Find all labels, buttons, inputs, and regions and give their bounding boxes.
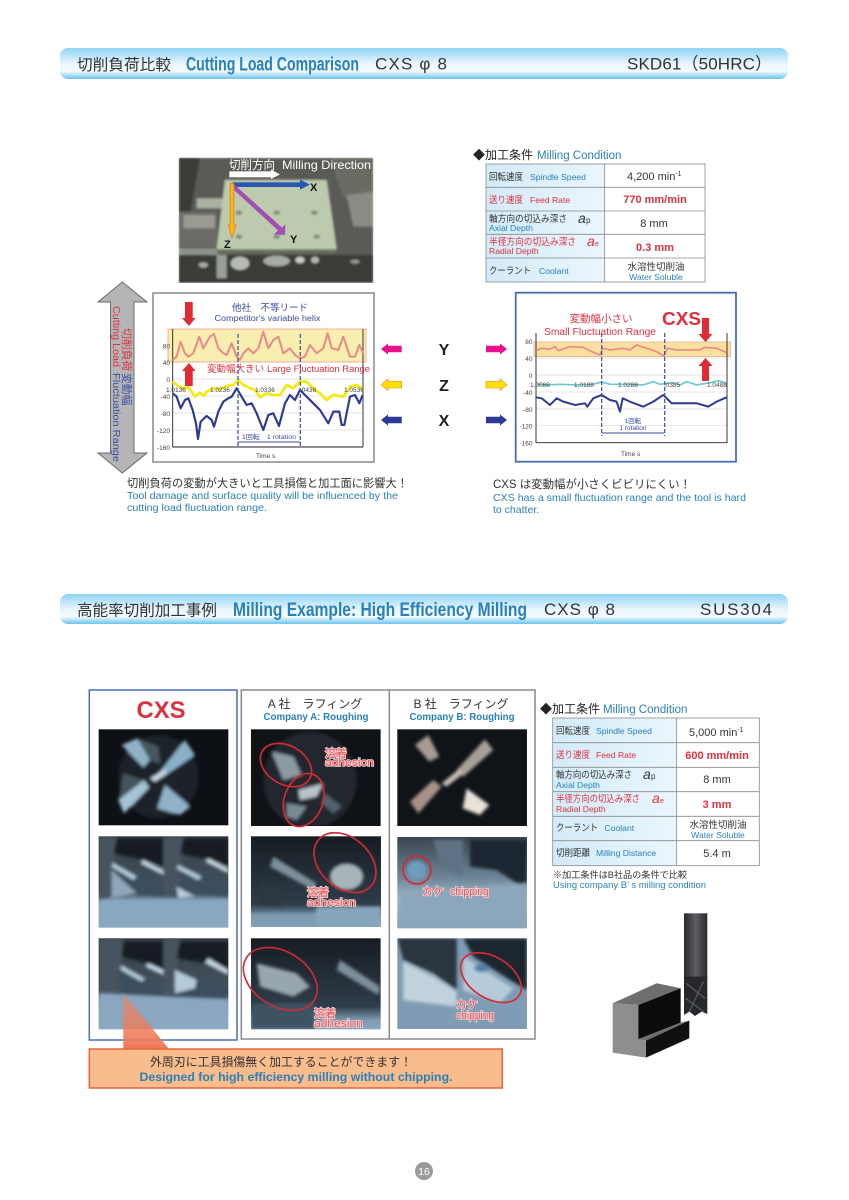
milling condition table: first test: 水溶性切削油	[627, 261, 685, 273]
caption: left chart	[127, 476, 408, 514]
photo: company A side view 2	[242, 938, 381, 1030]
milling condition table: first test: Axial Depth	[489, 223, 533, 233]
axis labels: 40	[525, 356, 533, 363]
line chart: competitor variable helix: Large Fluctuation Range	[267, 364, 370, 374]
milling condition table: first test: e	[595, 241, 599, 248]
callout: no tool damage: Designed for high efficiency milling without chipping.	[140, 1070, 452, 1084]
milling condition table: second test: 8 mm	[703, 774, 731, 786]
photo: workpiece with axes: 切削方向	[229, 157, 275, 172]
photo: workpiece with axes: Z	[224, 239, 231, 251]
photo annotations: adhesion	[314, 1018, 363, 1030]
panel: company A and B photos: Company B: Roughing	[410, 712, 515, 723]
axis labels: 0	[529, 373, 533, 380]
milling condition table: second test: 600 mm/min	[685, 750, 749, 762]
line chart: competitor variable helix: 1.0136	[166, 387, 186, 394]
milling condition table: first test: 8 mm	[640, 218, 668, 230]
axis labels: -120	[519, 424, 533, 430]
photo: company A side view 1	[251, 832, 381, 927]
axis labels: -80	[523, 407, 533, 414]
rotation markers	[602, 333, 665, 436]
section header: cutting load comparison	[60, 48, 788, 79]
photo: CXS side view 2	[99, 938, 228, 1029]
milling condition table: second test: ◆加工条件	[540, 702, 600, 716]
photo: workpiece with axes: Milling Direction	[282, 158, 371, 172]
axis labels	[519, 339, 533, 448]
section header: milling example: Milling Example: High Efficiency Milling	[233, 600, 527, 621]
callouts: 変動幅小さい	[570, 312, 632, 325]
photo annotations: adhesion	[325, 757, 374, 769]
photo annotations: chipping	[450, 886, 489, 898]
line chart: competitor variable helix: 1.0336	[255, 387, 275, 394]
line chart: CXS: 1.0488	[707, 382, 727, 389]
milling condition table: first test: 4,200 min	[627, 171, 675, 183]
photo: company A end face	[251, 729, 381, 832]
axes	[536, 333, 727, 443]
milling condition table: first test: 軸方向の切込み深さ	[489, 213, 567, 225]
line chart: competitor variable helix: 1.0236	[210, 387, 230, 394]
milling condition table: first test: p	[586, 216, 591, 225]
milling condition table: first test: 送り速度	[489, 194, 523, 206]
gray double arrow: fluctuation range: Fluctuation Range	[110, 373, 122, 462]
milling condition table: first test: Coolant	[539, 266, 569, 276]
highlight band	[534, 342, 731, 357]
section header: cutting load comparison: 切削負荷比較	[77, 56, 171, 74]
axis key arrows and labels: Y	[439, 342, 450, 359]
caption: right chart: CXS has a small fluctuation range and the tool is hard	[493, 492, 746, 504]
milling condition table: second test: Milling Distance	[596, 848, 656, 858]
axis labels: 80	[163, 344, 170, 350]
panel: company A and B photos: Company A: Roughing	[264, 712, 369, 723]
axis labels: -40	[161, 394, 170, 401]
milling condition table: second test: クーラント	[556, 823, 598, 834]
grid	[173, 346, 363, 430]
milling condition table: first test: a	[587, 233, 595, 249]
line chart: competitor variable helix: 1.0536	[344, 387, 364, 394]
milling condition table: second test: 切削距離	[556, 847, 590, 859]
axis labels: -80	[161, 411, 170, 418]
photo: CXS side view 1	[99, 836, 228, 928]
milling condition table: second test	[540, 702, 759, 890]
axis labels: 80	[525, 339, 533, 346]
page number	[415, 1162, 433, 1180]
line chart: competitor variable helix: 1回転 1 rotation	[242, 433, 296, 441]
milling condition table: second test: Milling Condition	[603, 704, 687, 716]
photo annotations: 溶着	[307, 885, 329, 899]
milling condition table: first test: Spindle Speed	[530, 172, 586, 182]
axis labels: 40	[163, 360, 170, 367]
line chart: CXS: 1回転	[625, 417, 642, 425]
photo: CXS end face	[99, 729, 228, 825]
line chart: competitor variable helix: .0436	[300, 387, 317, 394]
section header: milling example: SUS304	[700, 600, 772, 619]
axis labels: -160	[519, 440, 533, 448]
milling condition table: first test: -1	[675, 171, 682, 178]
section header: cutting load comparison: CXS φ 8	[375, 54, 447, 74]
milling condition table: second test: Coolant	[604, 823, 635, 833]
chart lines	[173, 332, 363, 439]
milling condition table: first test: Water Soluble	[629, 272, 683, 282]
photo: company B side view 1	[397, 837, 527, 928]
photo annotations: 溶着	[325, 746, 347, 760]
page number: 16	[418, 1166, 430, 1178]
gray double arrow: fluctuation range: Cutting Load	[110, 306, 122, 367]
line chart: competitor variable helix: Time s	[256, 453, 276, 460]
callouts: 他社 不等リード	[232, 302, 308, 314]
line chart: CXS: Small Fluctuation Range	[544, 327, 657, 338]
section header: milling example: CXS φ 8	[544, 600, 615, 619]
photo: company B end face	[397, 729, 527, 826]
photo: workpiece with axes: Y	[290, 234, 298, 246]
section header: cutting load comparison: Cutting Load Comparison	[186, 54, 359, 76]
line chart: CXS: Time s	[621, 451, 641, 458]
section header: milling example	[60, 594, 788, 624]
gray double arrow: fluctuation range	[98, 282, 147, 473]
line chart: CXS: 1.0088	[530, 382, 550, 389]
milling condition table: second test: 5.4 m	[703, 848, 731, 860]
milling condition table: first test: Milling Condition	[537, 150, 621, 162]
photo annotations: カケ	[422, 885, 444, 898]
milling condition table: first test: ◆加工条件	[473, 148, 533, 162]
gray double arrow: fluctuation range: 変動幅	[120, 373, 134, 406]
milling condition table: first test: 半径方向の切込み深さ	[489, 236, 576, 248]
milling condition table: second test: ※加工条件はB社品の条件で比較	[553, 869, 687, 880]
milling condition table: second test: p	[651, 772, 656, 781]
red arrows	[182, 302, 196, 386]
line chart: CXS: .0385	[664, 382, 681, 389]
caption: right chart: CXS は変動幅が小さくビビリにくい！	[493, 477, 691, 491]
axis labels: -40	[523, 390, 533, 397]
line chart: CXS: 1.0288	[618, 382, 638, 389]
illustration: end mill and workpiece	[613, 913, 707, 1058]
axis labels: 0	[166, 377, 170, 384]
milling condition table: second test: Water Soluble	[691, 830, 745, 840]
milling condition table: second test: 軸方向の切込み深さ	[556, 769, 632, 781]
caption: left chart: 切削負荷の変動が大きいと工具損傷と加工面に影響大！	[127, 476, 408, 490]
milling condition table: first test: a	[578, 210, 586, 226]
axis key arrows and labels	[381, 342, 507, 430]
milling condition table: second test: 水溶性切削油	[689, 819, 747, 831]
milling condition table: second test: a	[652, 790, 660, 806]
photo: workpiece with axes	[179, 157, 373, 283]
axis key arrows and labels: X	[439, 413, 450, 430]
panel: company A and B photos: B 社 ラフィング	[413, 696, 509, 711]
photo annotations: adhesion	[307, 897, 356, 909]
milling condition table: second test: Axial Depth	[556, 780, 600, 790]
line chart: competitor variable helix: Competitor's variable helix	[214, 313, 321, 323]
milling condition table: first test: Radial Depth	[489, 246, 539, 256]
milling condition table: second test: a	[643, 766, 651, 782]
red arrows	[698, 318, 712, 381]
caption: left chart: cutting load fluctuation range.	[127, 502, 267, 514]
callout: no tool damage: 外周刃に工具損傷無く加工することができます！	[150, 1054, 412, 1069]
milling condition table: first test: 770 mm/min	[623, 194, 687, 206]
highlight band	[168, 329, 366, 362]
axes	[173, 329, 363, 447]
photo: company B side view 2	[397, 938, 530, 1029]
grid	[536, 342, 727, 426]
milling condition table: second test: 半径方向の切込み深さ	[556, 793, 640, 805]
line chart: CXS: CXS	[662, 309, 701, 329]
line chart: competitor variable helix	[153, 293, 374, 462]
section header: cutting load comparison: SKD61（50HRC）	[627, 54, 772, 74]
photo annotations: カケ	[456, 998, 478, 1011]
line chart: CXS	[516, 293, 736, 462]
axis key arrows and labels: Z	[439, 378, 449, 395]
milling condition table: second test: Feed Rate	[596, 750, 636, 760]
line chart: CXS: 1 rotation	[619, 425, 647, 432]
section header: milling example: 高能率切削加工事例	[77, 602, 217, 620]
milling condition table: second test: Radial Depth	[556, 804, 606, 814]
milling condition table: first test	[473, 148, 705, 282]
line chart: competitor variable helix: 変動幅大きい	[207, 363, 264, 375]
caption: right chart: to chatter.	[493, 504, 539, 516]
panel: CXS tool photos	[89, 690, 237, 1040]
milling condition table: second test: Spindle Speed	[596, 726, 652, 736]
milling condition table: second test: e	[660, 798, 664, 805]
photo: workpiece with axes: X	[310, 182, 318, 194]
callout: no tool damage	[89, 993, 502, 1088]
milling condition table: second test: Using company B’ s milling condition	[553, 880, 706, 890]
axis labels	[157, 344, 170, 452]
milling condition table: second test: -1	[737, 727, 744, 734]
axis labels: -160	[157, 445, 170, 452]
panel: company A and B photos	[232, 690, 535, 1039]
milling condition table: first test: 0.3 mm	[636, 242, 674, 254]
rotation markers	[238, 334, 300, 446]
milling condition table: first test: 回転速度	[489, 171, 523, 183]
photo annotations: 溶着	[314, 1006, 336, 1020]
caption: right chart	[493, 477, 746, 516]
milling condition table: first test: Feed Rate	[530, 195, 570, 205]
photo annotations: chipping	[456, 1010, 494, 1022]
caption: left chart: Tool damage and surface quality will be influenced by the	[127, 490, 398, 502]
line chart: CXS: 1.0188	[574, 382, 594, 389]
chart lines	[536, 345, 727, 412]
panel: company A and B photos: A 社 ラフィング	[268, 696, 362, 711]
milling condition table: first test: クーラント	[489, 266, 531, 277]
milling condition table: second test: 回転速度	[556, 725, 590, 737]
gray double arrow: fluctuation range: 切削負荷	[120, 328, 134, 371]
milling condition table: second test: 3 mm	[703, 799, 732, 811]
photo annotations	[307, 746, 494, 1030]
panel: CXS tool photos: CXS	[136, 697, 186, 724]
axis labels: -120	[157, 428, 170, 435]
milling condition table: second test: 5,000 min	[689, 727, 737, 739]
milling condition table: second test: 送り速度	[556, 749, 590, 761]
